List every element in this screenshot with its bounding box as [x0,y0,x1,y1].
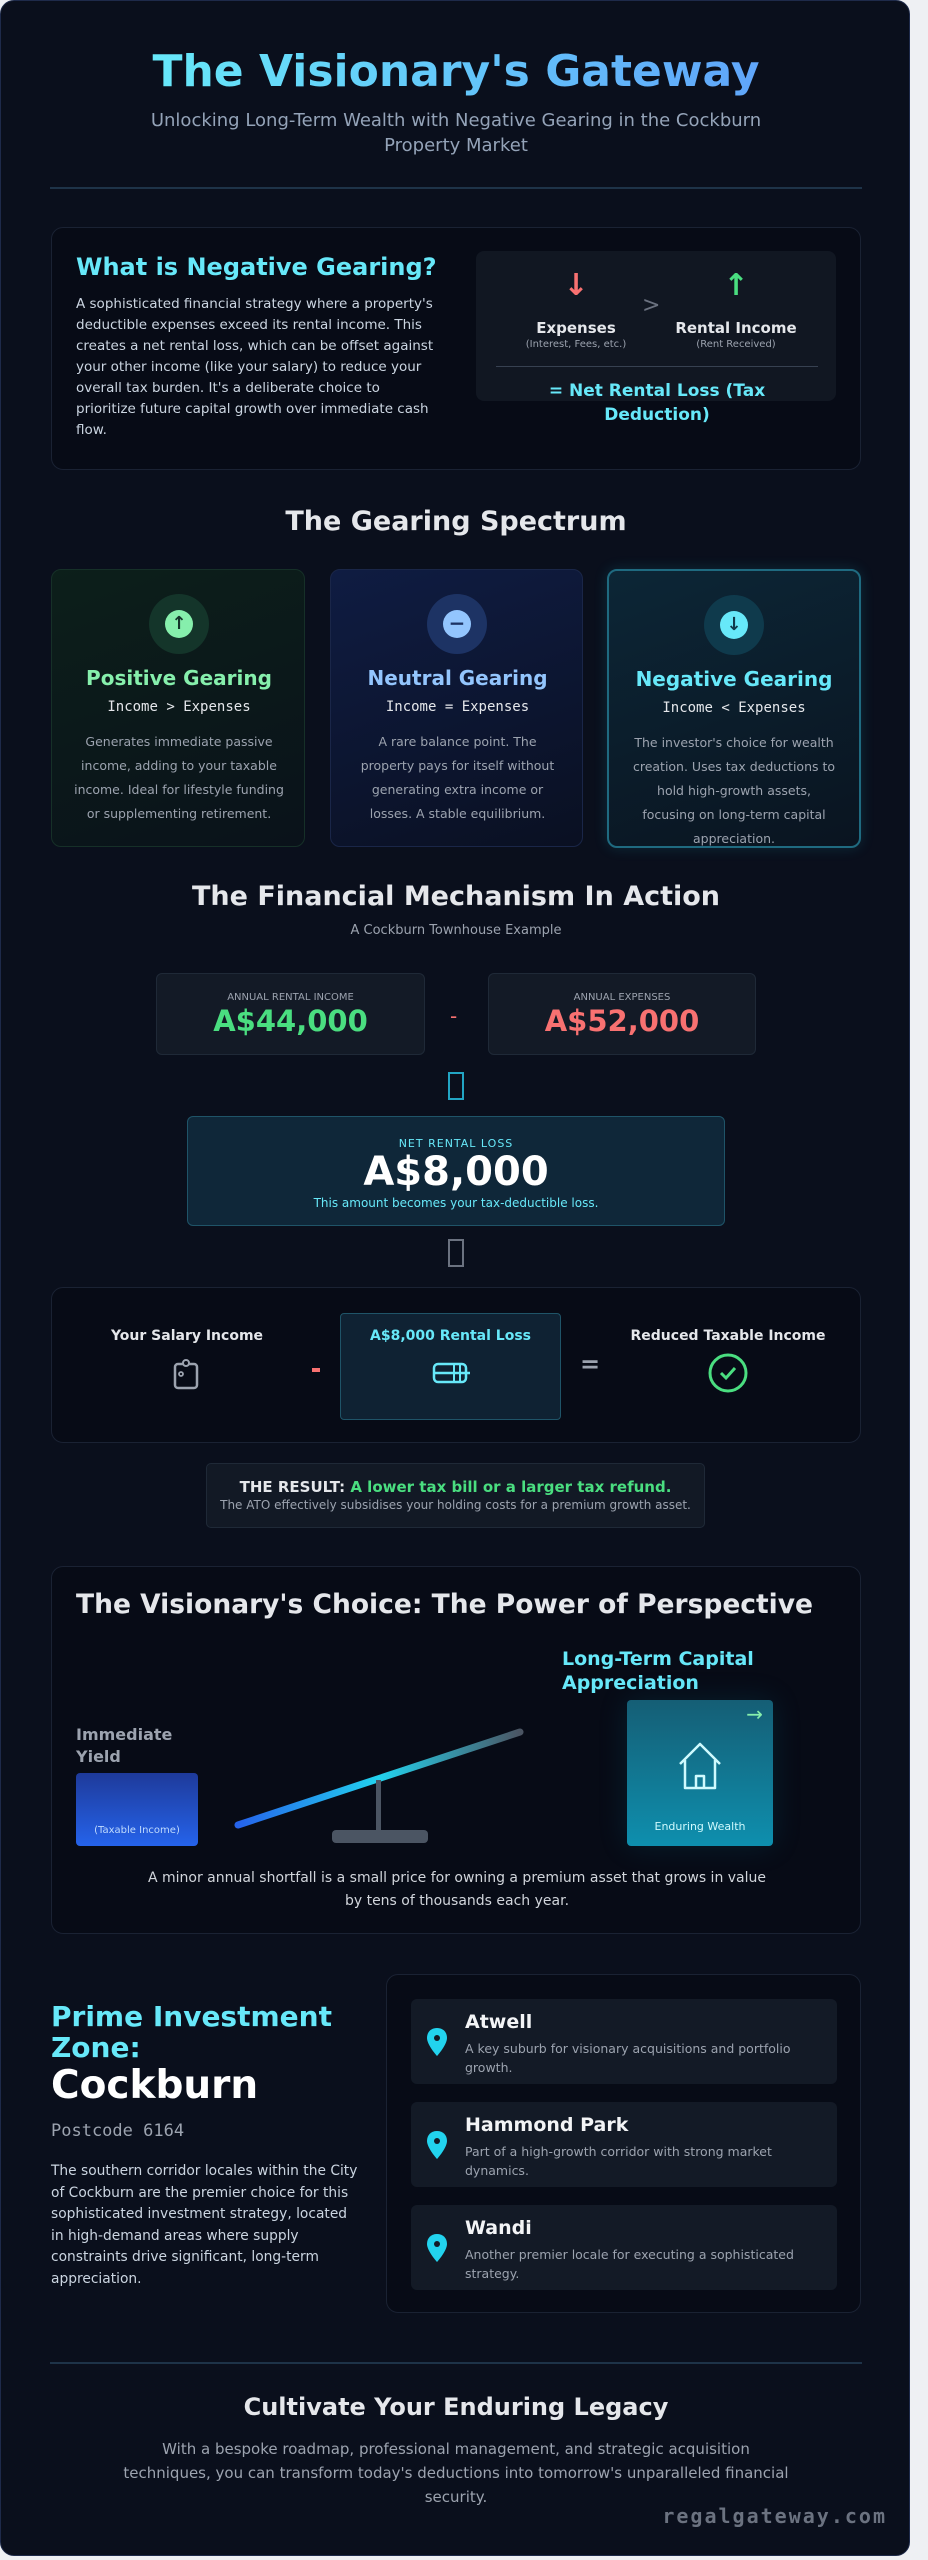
closing text: security. [425,2488,487,2506]
card: neutral gearing: generating extra income or [372,782,543,797]
suburb: wandi: strategy. [465,2266,519,2281]
result callout [206,1463,705,1528]
arrow: down (cyan) [448,1072,464,1100]
label: immediate yield: Immediate Yield [76,1725,172,1766]
seesaw [234,1728,524,1843]
card: negative gearing: creation. Uses tax deductions to [633,759,835,774]
heading: gearing spectrum: The Gearing Spectrum [285,506,627,537]
title: The Visionary's Gateway [152,46,760,97]
icon: cash [432,1362,470,1384]
label: long-term capital appreciation: Long-Term Capital Appreciation [562,1648,754,1694]
box: expenses: A$52,000 [545,1004,699,1038]
box: net rental loss: This amount becomes your tax-deductible loss. [314,1196,598,1210]
panel: visionary's choice [51,1566,861,1934]
expenses label: Expenses [536,319,616,337]
icon: check circle [708,1354,748,1392]
equation box: > [642,293,660,318]
reduced taxable income item [630,1328,826,1392]
prime investment zone text: Prime Investment [51,2000,332,2033]
heading: The Visionary's Choice: The Power of Perspective [76,1589,813,1620]
prime investment zone text [50,2000,357,2286]
icon: up circle: ↑ [171,613,187,634]
body text [76,296,433,438]
subheading: A Cockburn Townhouse Example [350,923,562,938]
salary income item: Your Salary Income [111,1328,263,1344]
teal box: enduring wealth: Enduring Wealth [654,1820,746,1833]
suburb: hammond park [411,2102,837,2187]
prime investment zone text: of Cockburn are the premier choice for this [51,2184,348,2200]
icon: wallet [174,1359,198,1390]
icon: up circle [149,594,209,654]
body text: creates a net rental loss, which can be offset against [76,338,433,354]
subtitle [151,110,761,156]
card: positive gearing: income, adding to your taxable [81,758,277,773]
suburb: atwell: growth. [465,2060,512,2075]
prime investment zone text: constraints drive significant, long-term [51,2249,319,2265]
card: neutral gearing: property pays for itself without [361,758,554,773]
card: positive gearing: Generates immediate passive [85,734,273,749]
box: rental income [156,973,425,1055]
card: negative gearing: appreciation. [693,831,775,846]
caption [148,1870,766,1909]
blue box: taxable income [76,1773,198,1846]
icon: minus circle [427,594,487,654]
minus [312,1368,320,1372]
icon: minus circle: − [449,611,465,635]
subtitle: Unlocking Long-Term Wealth with Negative Gearing in the Cockburn [151,110,761,131]
prime investment zone text: Postcode 6164 [51,2121,184,2141]
icon: down arrow: ↓ [563,268,589,303]
card: negative gearing: The investor's choice for wealth [634,735,834,750]
prime investment zone text: Cockburn [51,2063,258,2108]
expenses label [526,319,626,350]
icon: down circle [704,595,764,655]
suburb: hammond park: Part of a high-growth corridor with strong market [465,2144,772,2159]
icon: down circle: ↓ [726,614,742,635]
result text: Deduction) [604,405,710,425]
result text: = Net Rental Loss (Tax [549,381,765,401]
blue box: taxable income: (Taxable Income) [94,1825,180,1836]
card: neutral gearing: Neutral Gearing [367,666,548,690]
closing text: With a bespoke roadmap, professional management, and strategic acquisition [162,2440,750,2458]
body text: deductible expenses exceed its rental income. This [76,317,422,333]
heading: financial mechanism: The Financial Mechanism In Action [192,881,720,912]
icon: up arrow: ↑ [723,268,749,303]
panel: suburbs list [386,1974,861,2313]
salary income item [110,1328,263,1390]
box: rental income: ANNUAL RENTAL INCOME [227,992,354,1003]
subtitle: Property Market [384,135,528,156]
closing text [123,2440,789,2506]
box: rental income: A$44,000 [213,1004,368,1038]
heading: cultivate legacy: Cultivate Your Enduring Legacy [244,2393,668,2421]
prime investment zone text: in high-demand areas where supply [51,2228,299,2244]
suburb: wandi [411,2205,837,2290]
suburb: atwell: Atwell [465,2011,532,2033]
suburb: atwell [411,1999,837,2084]
rental loss box: A$8,000 Rental Loss [370,1328,531,1344]
panel: what is negative gearing [51,227,861,470]
box: expenses [488,973,756,1055]
caption: A minor annual shortfall is a small price for owning a premium asset that grows in value [148,1870,766,1886]
card: negative gearing: Negative Gearing [636,667,832,691]
suburb: wandi: Wandi [465,2217,532,2239]
card: neutral gearing [330,569,583,847]
prime investment zone text: appreciation. [51,2270,142,2286]
suburb: hammond park: Hammond Park [465,2114,628,2136]
rental income label: Rental Income [675,319,797,337]
card: positive gearing: or supplementing retirement. [87,806,271,821]
equals: = [580,1350,600,1378]
rental income label: (Rent Received) [696,339,776,350]
card: negative gearing: Income < Expenses [662,700,806,716]
caption: by tens of thousands each year. [345,1893,569,1909]
prime investment zone text: The southern corridor locales within the City [51,2163,357,2179]
panel: salary equation [51,1287,861,1443]
box: net rental loss: A$8,000 [363,1149,549,1195]
card: negative gearing: focusing on long-term capital [642,807,826,822]
box: expenses: ANNUAL EXPENSES [574,992,670,1003]
suburb: atwell: A key suburb for visionary acquisitions and portfolio [465,2041,791,2056]
body text: A sophisticated financial strategy where a property's [76,296,433,312]
card: neutral gearing: losses. A stable equilibrium. [370,806,545,821]
result callout: THE RESULT: A lower tax bill or a larger tax refund. [240,1478,671,1496]
expenses label: (Interest, Fees, etc.) [526,339,626,350]
arrow: down (gray) [448,1239,464,1267]
card: positive gearing [51,569,305,847]
card: negative gearing [607,569,861,848]
footer brand: regalgateway.com [662,2504,887,2528]
result callout: The ATO effectively subsidises your holding costs for a premium growth asset. [220,1498,691,1512]
rental income label [675,319,797,350]
card: positive gearing: Income > Expenses [107,699,251,715]
box: net rental loss [187,1116,725,1226]
card: positive gearing: income. Ideal for lifestyle funding [74,782,284,797]
closing text: techniques, you can transform today's deductions into tomorrow's unparalleled financial [123,2464,789,2482]
teal box: enduring wealth [627,1700,773,1846]
card: negative gearing: hold high-growth assets, [657,783,811,798]
box: net rental loss: NET RENTAL LOSS [399,1137,513,1150]
card: positive gearing: Positive Gearing [86,666,272,690]
heading: What is Negative Gearing? [76,253,437,281]
equation box [476,251,836,401]
teal box: enduring wealth: → [746,1702,763,1726]
card: neutral gearing: A rare balance point. The [378,734,537,749]
suburb: hammond park: dynamics. [465,2163,529,2178]
prime investment zone text: sophisticated investment strategy, located [51,2206,347,2222]
icon: house [679,1742,721,1790]
minus: - [450,1004,457,1028]
rental loss box [340,1313,561,1420]
suburb: wandi: Another premier locale for executing a sophisticated [465,2247,794,2262]
result text [549,381,765,425]
body text: flow. [76,422,107,438]
card: neutral gearing: Income = Expenses [386,699,529,715]
reduced taxable income item: Reduced Taxable Income [630,1328,826,1344]
prime investment zone text: Zone: [51,2031,141,2064]
body text: prioritize future capital growth over immediate cash [76,401,429,417]
body text: overall tax burden. It's a deliberate choice to [76,380,380,396]
body text: your other income (like your salary) to reduce your [76,359,421,375]
